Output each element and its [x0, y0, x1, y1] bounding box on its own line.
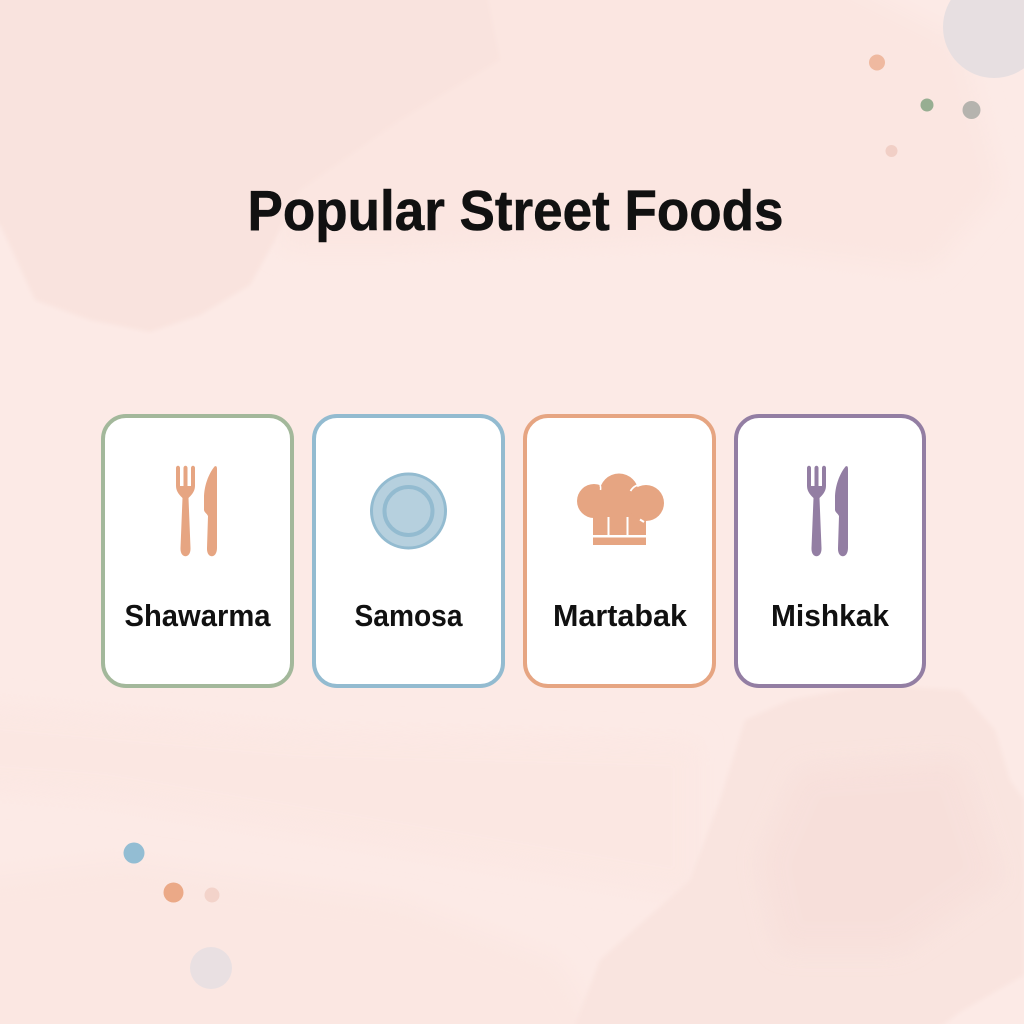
icon: fork and knife	[807, 466, 848, 556]
label: Samosa	[354, 598, 463, 633]
icon: fork and knife	[176, 466, 217, 556]
decorative dots: bottom left	[124, 842, 232, 989]
card frame	[103, 416, 292, 686]
label: Mishkak	[771, 598, 890, 633]
icon: plate	[372, 474, 446, 548]
card: Shawarma	[103, 416, 292, 686]
card: Mishkak	[736, 416, 924, 686]
card: Samosa	[314, 416, 503, 686]
card frame	[736, 416, 924, 686]
card frame	[525, 416, 714, 686]
card frame	[314, 416, 503, 686]
title: Popular Street Foods	[248, 179, 784, 243]
icon: chef hat	[577, 474, 664, 545]
label: Shawarma	[124, 598, 271, 633]
decorative dots: top right	[869, 0, 1024, 157]
label: Martabak	[553, 598, 688, 633]
card: Martabak	[525, 416, 714, 686]
